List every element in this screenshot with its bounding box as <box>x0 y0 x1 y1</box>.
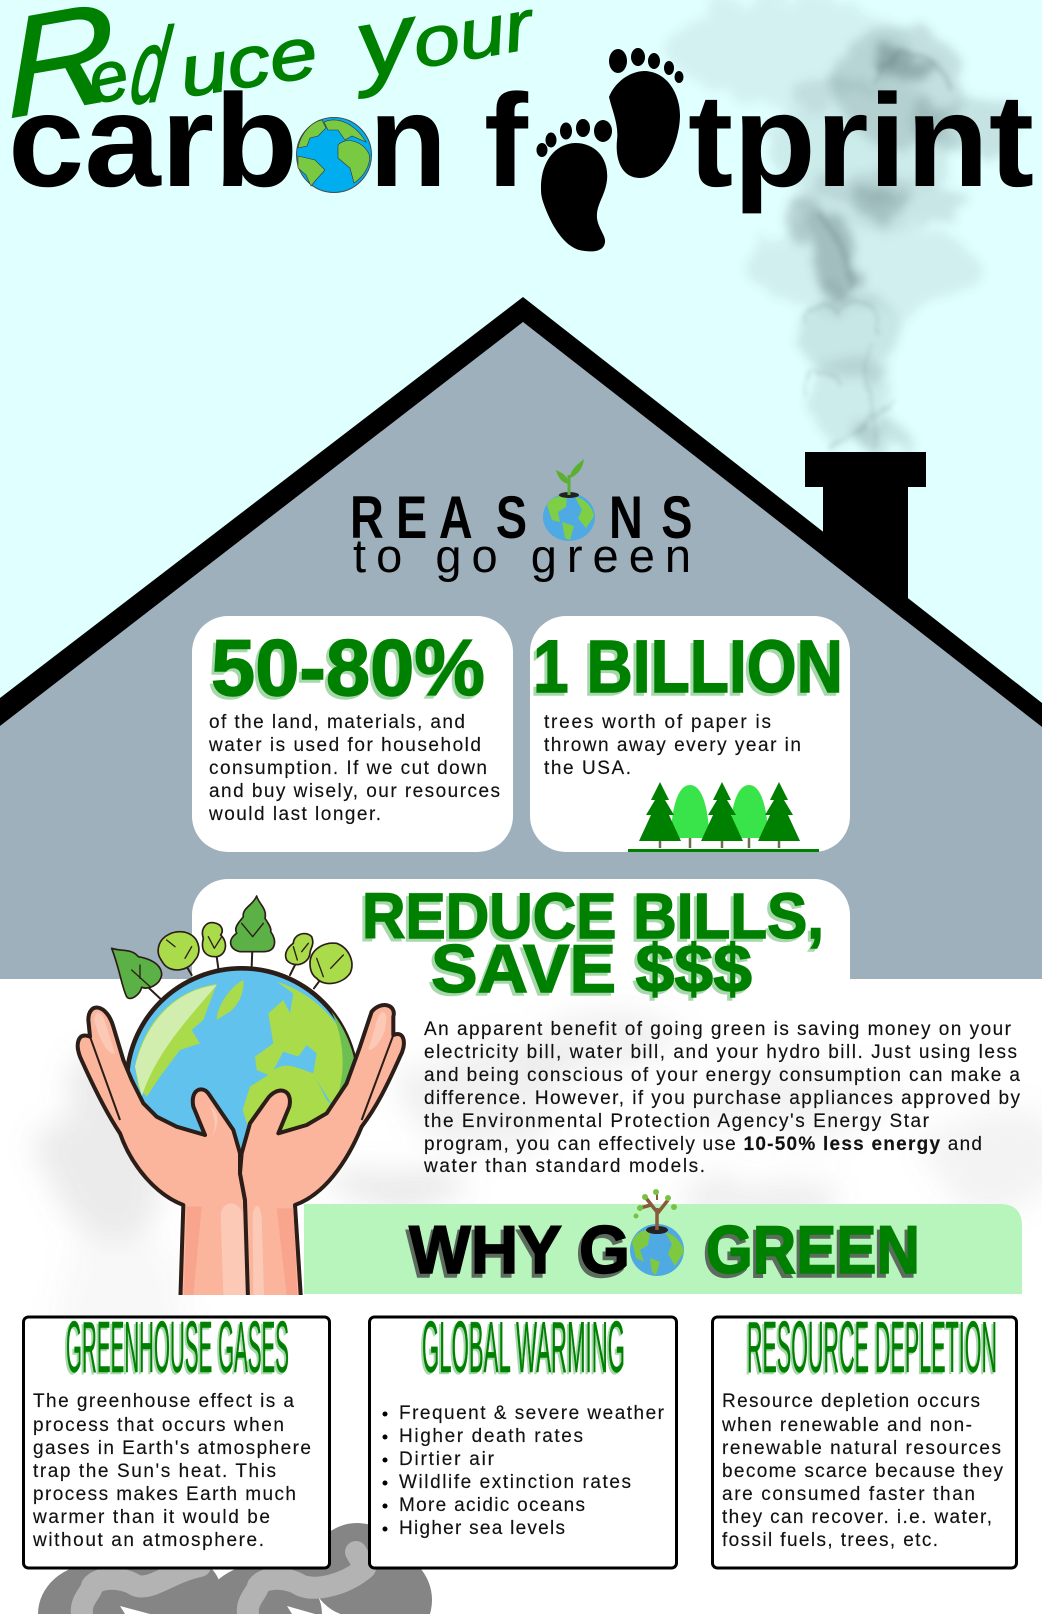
text block: resource body <box>721 1391 1004 1551</box>
icon: row of trees <box>628 782 819 852</box>
list: warming effects: Higher death rates <box>399 1426 583 1447</box>
icon: right hand <box>240 1005 404 1310</box>
list: warming effects: Higher sea levels <box>399 1518 565 1539</box>
list: warming effects: Dirtier air <box>399 1449 495 1470</box>
panel: greenhouse gases <box>24 1308 330 1568</box>
text block: stat description: would last longer. <box>208 804 381 825</box>
text block: reduce bills body: difference. However, if you purchase appliances approved by <box>424 1088 1021 1109</box>
text block: trees description: trees worth of paper is <box>544 712 771 733</box>
heading: reasons to go green: NS <box>609 484 692 551</box>
heading: reduce bills save money: REDUCE BILLS, <box>362 880 824 952</box>
text block: resource body: fossil fuels, trees, etc. <box>722 1530 938 1551</box>
title: reduce your <box>4 0 542 148</box>
list: warming effects: More acidic oceans <box>399 1495 585 1516</box>
text: GREENHOUSE GASES <box>66 1308 289 1388</box>
panel: 50-80% stat <box>192 616 513 852</box>
title: carbon footprint: n <box>369 67 447 214</box>
background: sky <box>0 0 1042 985</box>
chimney <box>805 452 926 620</box>
text block: greenhouse body: process makes Earth much <box>33 1484 296 1505</box>
text block: reduce bills body: electricity bill, water bill, and your hydro bill. Just using less <box>424 1042 1017 1063</box>
list: warming effects <box>382 1403 665 1539</box>
text block: stat description: of the land, materials, and <box>209 712 465 733</box>
icon: earth globe in title <box>296 118 372 192</box>
roof <box>0 297 1042 727</box>
lower smoke haze <box>35 1014 1042 1255</box>
list: warming effects: Wildlife extinction rates <box>399 1472 631 1493</box>
house body <box>0 322 1042 979</box>
text block: stat description <box>208 712 500 825</box>
text block: stat description: and buy wisely, our resources <box>209 781 500 802</box>
icon: right footprint <box>609 48 684 178</box>
text block: resource body: become scarce because they <box>722 1461 1004 1482</box>
icon: trees on the globe <box>112 896 352 998</box>
panel: why go green banner: WHY G <box>409 1212 630 1288</box>
text block: resource body: Resource depletion occurs <box>722 1391 980 1412</box>
heading: reasons to go green: to go green <box>353 529 691 582</box>
panel: global warming <box>370 1308 676 1568</box>
icon: earth globe <box>127 968 357 1198</box>
heading: reasons to go green: REAS <box>350 484 527 551</box>
text block: greenhouse body: without an atmosphere. <box>32 1530 264 1551</box>
panel: why go green banner <box>304 1189 1022 1294</box>
text block: resource body: are consumed faster than <box>722 1484 975 1505</box>
title: reduce your: e <box>81 34 135 119</box>
text block: greenhouse body <box>32 1391 311 1551</box>
text block: greenhouse body: The greenhouse effect is a <box>33 1391 294 1412</box>
text block: reduce bills body: the Environmental Protection Agency's Energy Star <box>424 1111 930 1132</box>
title: carbon footprint: carb <box>8 67 298 214</box>
title: reduce your: d <box>125 7 177 127</box>
lower white section <box>0 979 1042 1614</box>
list: warming effects: Frequent & severe weather <box>399 1403 665 1424</box>
text block: trees description: the USA. <box>544 758 631 779</box>
text block: trees description <box>544 712 801 779</box>
panel: why go green banner: GREEN <box>706 1212 920 1288</box>
panel: 50-80% stat: 50-80% <box>211 623 485 712</box>
heading: reduce bills save money: SAVE $$$ <box>431 931 752 1007</box>
panel: reduce bills card <box>192 879 850 1019</box>
text block: greenhouse body: trap the Sun's heat. This <box>33 1461 276 1482</box>
text block: stat description: water is used for household <box>208 735 481 756</box>
icon: globe with tree <box>630 1189 684 1276</box>
icon: left hand <box>78 1008 250 1310</box>
illustration: hands holding earth with trees <box>78 896 404 1310</box>
text block: reduce bills body: program, you can effectively use 10-50% less energy and <box>424 1134 982 1155</box>
icon: grey cloud at bottom <box>38 1523 432 1614</box>
text block: resource body: when renewable and non- <box>721 1415 972 1436</box>
text block: greenhouse body: warmer than it would be <box>32 1507 270 1528</box>
chimney smoke <box>670 0 1025 451</box>
icon: left footprint <box>536 119 612 251</box>
text block: greenhouse body: gases in Earth's atmosphere <box>33 1438 311 1459</box>
text block: greenhouse body: process that occurs when <box>33 1415 284 1436</box>
heading: reduce bills save money <box>362 880 824 1007</box>
text block: reduce bills body <box>423 1019 1021 1177</box>
panel: resource depletion <box>712 1308 1016 1568</box>
heading: reasons to go green <box>350 459 692 582</box>
text block: reduce bills body: and being conscious of your energy consumption can make a <box>424 1065 1020 1086</box>
text block: stat description: consumption. If we cut down <box>209 758 487 779</box>
text block: resource body: renewable natural resources <box>722 1438 1001 1459</box>
text block: resource body: they can recover. i.e. water, <box>722 1507 992 1528</box>
icon: globe with sprout <box>543 459 595 541</box>
panel: 1 billion stat <box>530 616 850 852</box>
text block: reduce bills body: An apparent benefit of going green is saving money on your <box>424 1019 1012 1040</box>
title: reduce your: uce <box>174 12 323 113</box>
text block: trees description: thrown away every year in <box>544 735 801 756</box>
panel: 1 billion stat: 1 BILLION <box>533 625 843 708</box>
title: carbon footprint: tprint <box>688 67 1034 214</box>
title: carbon footprint: f <box>484 67 529 214</box>
title: carbon footprint <box>8 48 1034 251</box>
text block: reduce bills body: water than standard models. <box>423 1156 705 1177</box>
